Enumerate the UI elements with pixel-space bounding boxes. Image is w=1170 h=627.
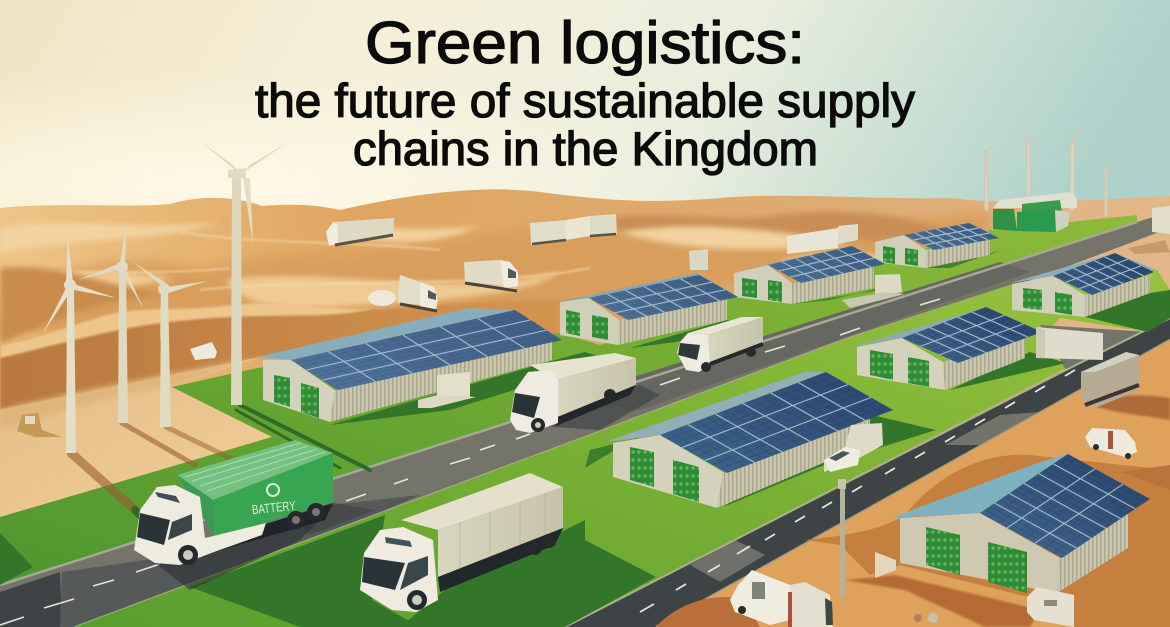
green truck — [134, 440, 335, 590]
white truck lower — [360, 473, 563, 612]
desert truck with load — [368, 275, 438, 311]
far large trailer — [787, 224, 858, 254]
lamp post — [838, 479, 846, 597]
small equipment on sand — [17, 413, 62, 437]
truck logo text: BATTERY — [251, 498, 297, 517]
building B — [605, 372, 893, 508]
wind turbine shadows — [71, 405, 370, 525]
workers — [914, 613, 938, 623]
small van right — [1085, 428, 1137, 459]
wind turbine: left rear — [78, 220, 144, 423]
far building G — [874, 223, 999, 268]
desert trucks center — [530, 214, 617, 245]
building H — [557, 273, 738, 345]
long trailer by building B — [824, 423, 883, 472]
sky — [0, 0, 1170, 230]
distant turbines — [982, 120, 1122, 215]
wind turbine: front left — [42, 238, 116, 453]
building C — [875, 454, 1150, 593]
equipment beside building A — [418, 372, 476, 408]
desert truck small box — [464, 260, 518, 291]
white van bottom — [730, 570, 833, 627]
ground shadows — [0, 250, 1170, 627]
far right equipment — [1128, 206, 1170, 254]
grass field lower — [75, 270, 1170, 627]
road shadows — [300, 385, 660, 535]
white truck upper — [677, 317, 763, 372]
building F — [732, 246, 885, 304]
grass field upper — [0, 215, 1137, 585]
road upper — [0, 212, 1170, 627]
gate structure — [1036, 327, 1103, 360]
road branch right — [1040, 320, 1170, 372]
title line 1: Green logistics: — [365, 10, 805, 76]
title — [255, 10, 916, 175]
green containers and depot — [993, 192, 1077, 232]
small white van — [190, 342, 217, 360]
equipment box bottom — [1027, 587, 1074, 627]
building E — [1010, 253, 1157, 317]
building D — [852, 307, 1042, 390]
title line 3: chains in the Kingdom — [353, 122, 818, 175]
title line 2: the future of sustainable supply — [255, 74, 916, 127]
wind turbine: right — [133, 262, 207, 427]
sand lower right — [656, 340, 1170, 627]
small utility unit — [689, 249, 708, 270]
truck near road right — [1081, 352, 1139, 408]
far equipment on grass — [842, 274, 905, 308]
desert dunes — [0, 189, 1170, 517]
building A — [257, 308, 562, 422]
wind turbine: large center — [200, 141, 290, 405]
desert truck far left — [326, 218, 394, 246]
road lower — [565, 318, 1170, 627]
white truck middle — [510, 353, 636, 433]
